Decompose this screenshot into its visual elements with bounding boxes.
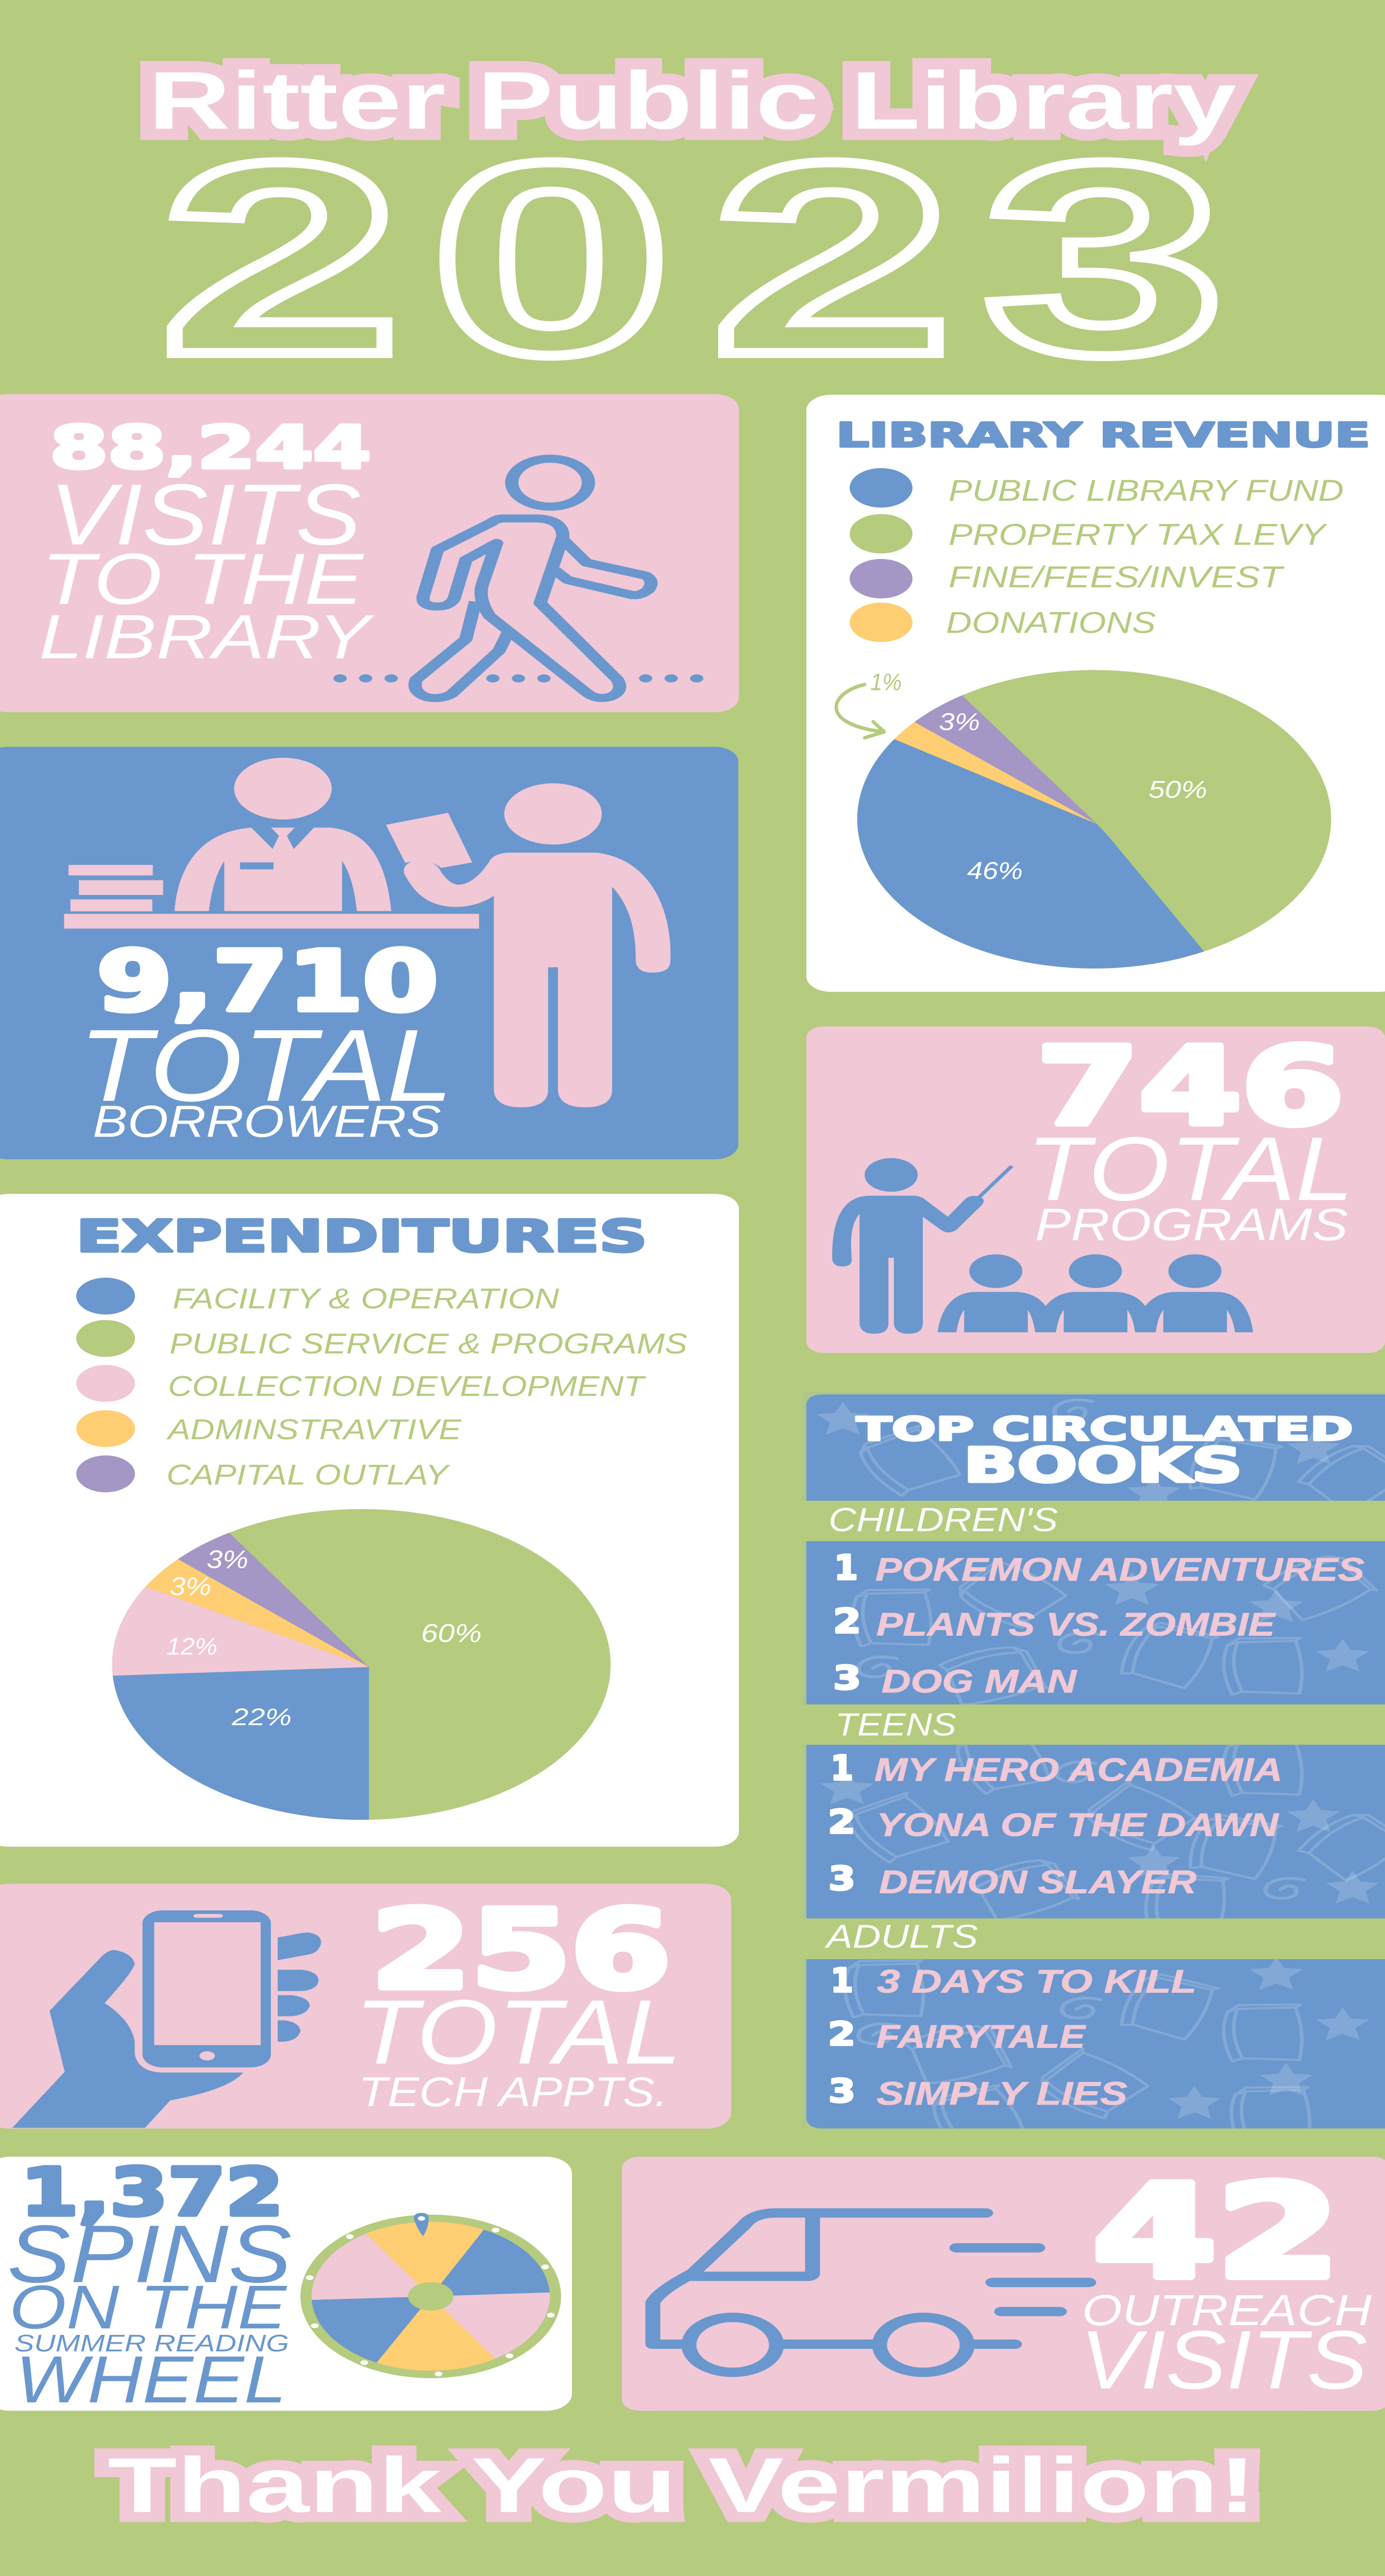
label: visits to the library: VISITS [49,466,361,563]
list: teens: TEENS [835,1706,956,1742]
pie chart: revenue [857,670,1331,969]
list: children's: 1 [834,1548,858,1587]
list: children's: 3 [833,1659,861,1697]
list: teens: YONA OF THE DAWN [876,1807,1279,1843]
callout: 1% [836,669,902,738]
list: adults [824,1919,1196,2112]
stat: 746: 746 [1037,1024,1344,1148]
panel: tech appointments [0,1884,731,2129]
legend: expenditures: CAPITAL OUTLAY [166,1459,450,1491]
icon: hand holding phone [12,1910,321,2128]
pie labels: revenue [939,708,1207,885]
stat: 256: 256 [371,1887,671,2013]
pie labels: expenditures: 3% [207,1545,248,1573]
stat: 88,244: 88,244 [50,414,371,482]
list: teens: DEMON SLAYER [879,1864,1196,1900]
footer: thank you vermilion: Thank You Vermilion! [108,2442,1256,2529]
legend: expenditures: ADMINSTRAVTIVE [166,1413,462,1446]
heading: top circulated books [856,1410,1353,1493]
pie labels: revenue: 3% [939,708,980,735]
stat: 1,372: 1,372 [21,2154,283,2230]
legend: revenue: DONATIONS [946,606,1156,639]
list: children's: DOG MAN [882,1663,1077,1700]
list: children's: CHILDREN'S [829,1501,1058,1538]
icon: prize wheel [300,2213,561,2378]
stat: 9,710: 9,710 [97,934,438,1030]
pie labels: expenditures: 60% [421,1619,482,1648]
legend: revenue [850,468,1344,642]
heading: top circulated books: TOP CIRCULATED [856,1410,1353,1448]
label: visits to the library: LIBRARY [39,602,375,672]
panel: library revenue [806,395,1385,1015]
pie labels: expenditures: 12% [166,1633,217,1660]
panel: programs [806,1024,1385,1353]
pie labels: expenditures: 22% [231,1704,292,1731]
list: teens: 2 [828,1803,855,1841]
list: adults: ADULTS [824,1919,978,1955]
pie chart: expenditures [112,1509,611,1820]
icon: librarian and patron at desk [64,758,670,1107]
heading: expenditures: EXPENDITURES [76,1211,647,1262]
heading: top circulated books: BOOKS [964,1437,1242,1493]
icon: walking person [333,459,703,698]
label: total borrowers [78,1008,453,1146]
list: children's: PLANTS VS. ZOMBIE [876,1606,1276,1642]
label: spins on the summer reading wheel: SUMMER READING [14,2330,289,2357]
label: total tech appts.: TECH APPTS. [359,2069,668,2115]
list: adults: SIMPLY LIES [876,2075,1127,2112]
list: teens: 3 [829,1859,855,1897]
label: total tech appts. [354,1981,682,2115]
pie labels: expenditures [166,1545,482,1731]
pie labels: expenditures: 3% [170,1572,211,1601]
label: total borrowers: TOTAL [78,1008,453,1123]
pie labels: revenue: 50% [1148,776,1207,803]
legend: expenditures: PUBLIC SERVICE & PROGRAMS [170,1327,687,1360]
list: adults: FAIRYTALE [876,2019,1086,2055]
list: adults: 2 [828,2015,855,2053]
list: adults: 3 [829,2072,855,2110]
icon: teacher and students [832,1158,1253,1334]
list: adults: 3 DAYS TO KILL [877,1963,1196,1999]
label: spins on the summer reading wheel: ON THE [9,2273,287,2342]
label: total tech appts.: TOTAL [354,1981,682,2083]
panel: expenditures [0,1194,739,1873]
heading: 2023 outline: 2023 [160,106,1225,411]
title [148,55,1237,411]
pie labels: revenue: 46% [967,857,1023,885]
icon: van [653,2213,1089,2372]
heading: Ritter Public Library: Ritter Public Library [148,55,1237,146]
list: teens [828,1706,1282,1900]
legend: revenue: FINE/FEES/INVEST [949,561,1285,594]
heading: library revenue: LIBRARY REVENUE [836,416,1370,455]
panel: visits [0,394,739,712]
legend: expenditures: COLLECTION DEVELOPMENT [168,1370,647,1402]
label: total borrowers: BORROWERS [93,1096,441,1146]
legend: expenditures: FACILITY & OPERATION [173,1282,560,1315]
stat: 42: 42 [1093,2158,1340,2307]
label: visits to the library [39,466,375,672]
legend: expenditures [76,1278,687,1493]
panel: summer reading wheel [0,2154,572,2417]
list: teens: 1 [831,1749,853,1788]
panel: outreach [622,2157,1385,2411]
label: spins on the summer reading wheel: WHEEL [15,2343,286,2417]
panel: top circulated books [802,1392,1385,2154]
label: visits to the library: TO THE [41,538,364,619]
list: children's [829,1501,1364,1700]
list: children's: 2 [833,1602,861,1641]
callout: 1%: 1% [870,669,902,696]
label: spins on the summer reading wheel: SPINS [7,2208,292,2299]
list: adults: 1 [831,1961,853,2000]
label: spins on the summer reading wheel [7,2208,292,2417]
panel: borrowers [0,747,738,1159]
